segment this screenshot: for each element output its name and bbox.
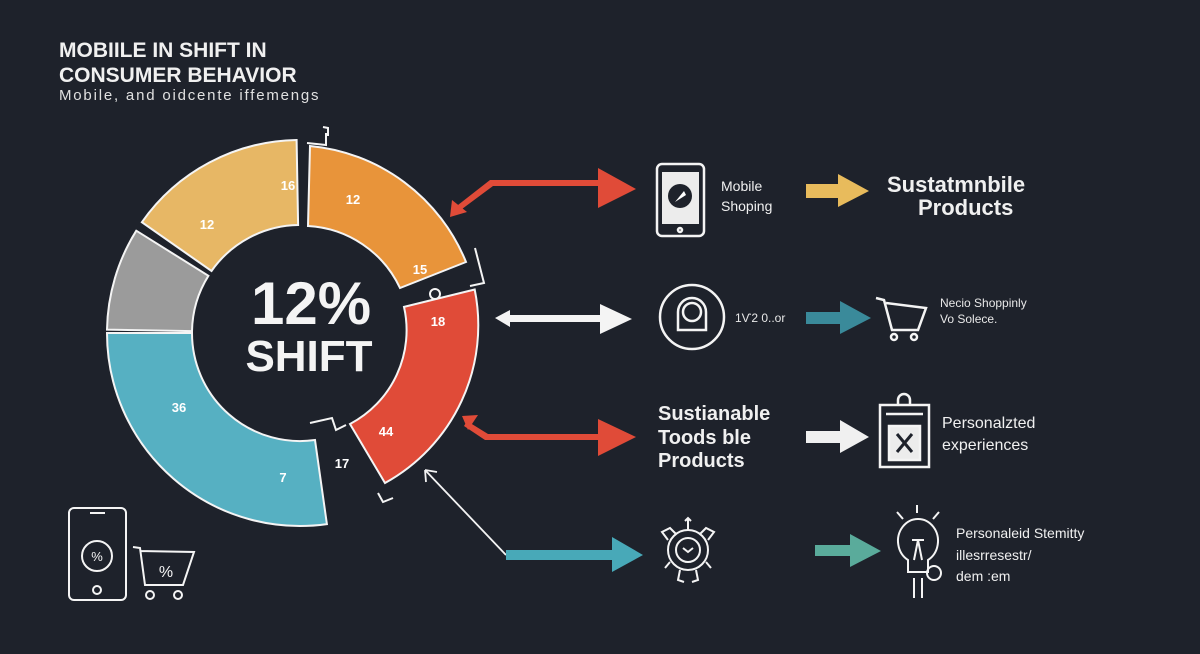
icon: cart bottom-left: %: [159, 564, 173, 581]
donut chart: [107, 140, 478, 526]
text: mobile shopping: [721, 178, 772, 214]
text: mobile shopping: Mobile: [721, 178, 762, 194]
text: mobile shopping: Shoping: [721, 198, 772, 214]
icon: cart: [876, 298, 926, 340]
icon: clipboard: [880, 394, 929, 467]
text: sustainable products: [887, 172, 1025, 220]
text: middle label: 1Ѵ2 0..or: [735, 311, 785, 325]
icon: phone top: [657, 164, 704, 236]
segment: orange: [308, 146, 466, 288]
title: Mobile, and oidcente iffemengs: [59, 87, 320, 104]
arrow: red bottom: [462, 415, 636, 456]
chart labels: 15: [413, 262, 427, 277]
arrow: white: [806, 420, 869, 453]
text: sustainable goods: Toods ble: [658, 427, 751, 449]
text: sustainable goods: [658, 403, 770, 472]
chart labels: 7: [279, 470, 287, 485]
arrow: green: [815, 534, 881, 567]
decorative brackets: [307, 127, 484, 502]
segment: teal: [107, 333, 327, 526]
icon: phone bottom-left: [69, 508, 126, 600]
arrow: teal bottom: [506, 537, 643, 572]
icon: bulb: [897, 505, 941, 598]
icon: gear: [662, 518, 714, 582]
arrow: red top: [450, 168, 636, 217]
text: personalized sustainability: [956, 525, 1084, 584]
segment: gray: [107, 231, 208, 331]
chart labels: 16: [281, 178, 295, 193]
chart labels: [172, 178, 445, 485]
chart labels: 44: [379, 424, 394, 439]
text: sustainable products: Products: [918, 195, 1013, 220]
title: MOBIILE IN SHIFT IN: [59, 39, 267, 62]
title: CONSUMER BEHAVIOR: [59, 64, 297, 87]
arrow: thin white: [425, 470, 506, 555]
chart labels: 36: [172, 400, 186, 415]
text: sustainable goods: Products: [658, 450, 745, 472]
text: sustainable products: Sustatmnbile: [887, 172, 1025, 197]
text: shopping note: [940, 296, 1027, 326]
chart labels: 12: [346, 192, 360, 207]
icon: user circle: [660, 285, 724, 349]
center text: 12%: [251, 270, 371, 337]
chart labels: 18: [431, 314, 445, 329]
chart labels: 17: [335, 456, 349, 471]
center text: [245, 270, 373, 381]
text: personalized experiences: experiences: [942, 437, 1028, 454]
chart labels: 12: [200, 217, 214, 232]
segment: red: [350, 290, 478, 483]
segment: yellow: [142, 140, 298, 271]
icon: cart bottom-left: [133, 547, 194, 599]
icon: phone bottom-left: %: [91, 549, 103, 564]
text: sustainable goods: Sustianable: [658, 403, 770, 425]
text: personalized experiences: [942, 415, 1035, 454]
title: [59, 39, 320, 104]
text: personalized experiences: Personalzted: [942, 415, 1035, 432]
arrow: yellow: [806, 174, 869, 207]
text: shopping note: Vo Solece.: [940, 312, 997, 326]
arrow: white double: [495, 304, 632, 334]
text: personalized sustainability: illesrresestr/: [956, 547, 1032, 563]
text: personalized sustainability: dem :em: [956, 568, 1010, 584]
text: personalized sustainability: Personaleid Stemitty: [956, 525, 1084, 541]
text: shopping note: Necio Shoppinly: [940, 296, 1027, 310]
arrow: teal: [806, 301, 871, 334]
center text: SHIFT: [245, 332, 373, 381]
